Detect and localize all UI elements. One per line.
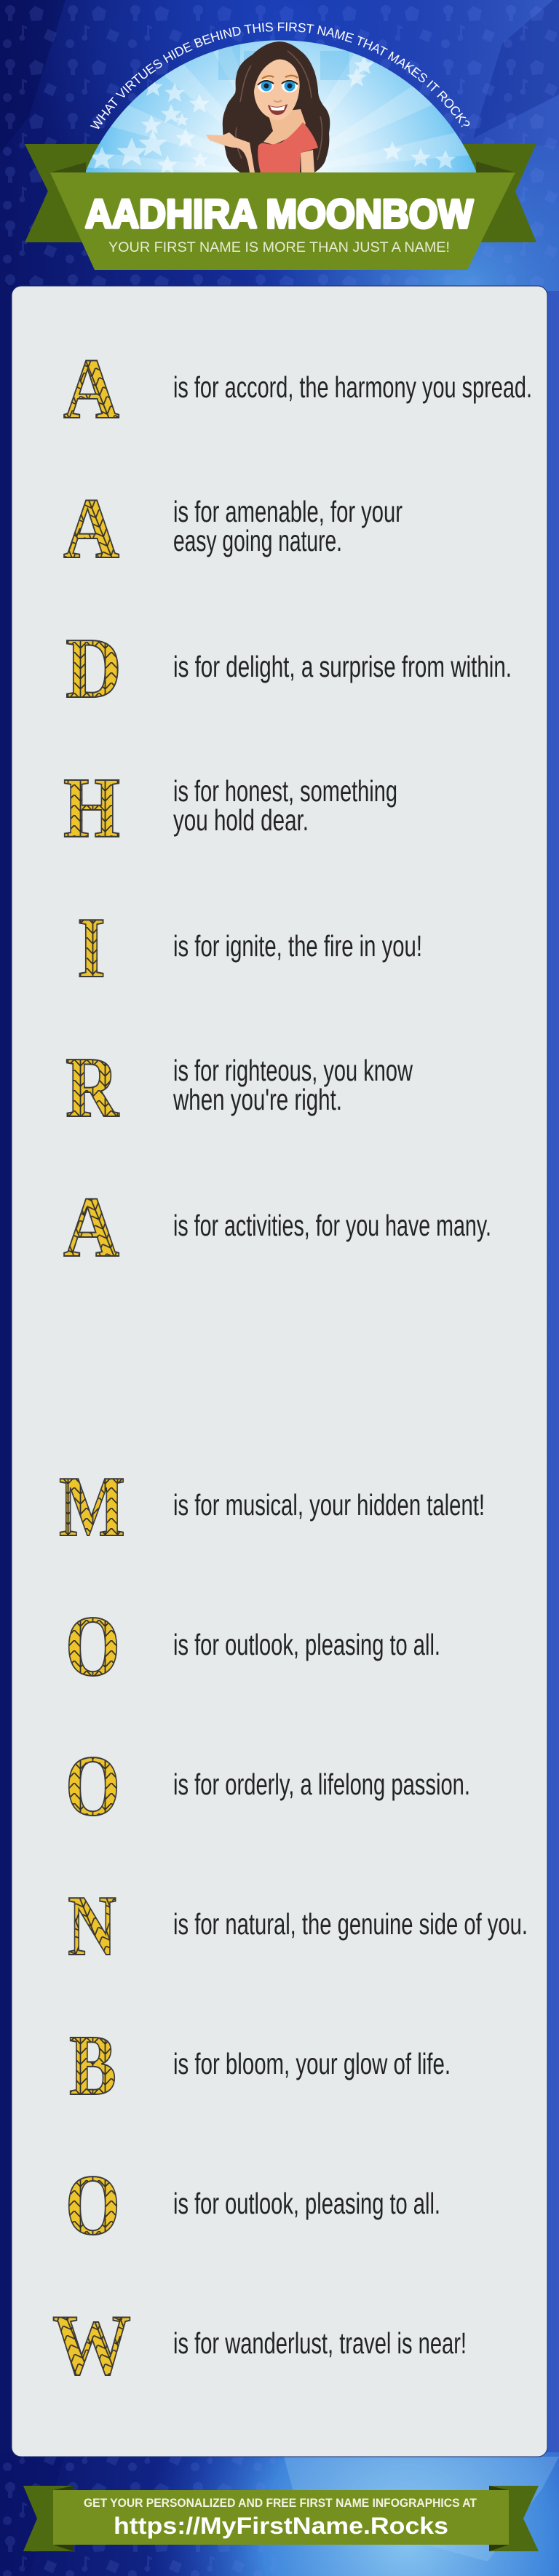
neck and chest <box>263 109 306 145</box>
ribbon front <box>53 2490 509 2545</box>
text: is for righteous, you know <box>173 1054 413 1087</box>
ribbon left tail <box>25 144 102 242</box>
ribbon tails <box>23 2486 539 2551</box>
row M musical <box>59 1458 485 1554</box>
ribbon right tail <box>460 143 536 242</box>
text: easy going nature. <box>173 524 342 557</box>
text: when you're right. <box>173 1083 342 1116</box>
letter D: D <box>66 620 122 716</box>
far arm <box>301 150 314 172</box>
row W wanderlust <box>52 2297 467 2393</box>
mouth <box>268 104 288 115</box>
row A accord <box>63 341 532 437</box>
letter I: I <box>77 899 106 995</box>
letter A: A <box>63 480 119 576</box>
sunburst dome <box>86 40 476 172</box>
row D delight <box>66 620 512 716</box>
letter N: N <box>68 1877 116 1973</box>
call to action: GET YOUR PERSONALIZED AND FREE FIRST NAME INFOGRAPHICS AT <box>84 2497 477 2510</box>
text <box>173 1054 413 1116</box>
arm and hand <box>206 132 255 172</box>
url: https://MyFirstName.Rocks <box>114 2513 448 2539</box>
letter A: A <box>63 1179 119 1275</box>
row O orderly <box>66 1738 470 1834</box>
letter A: A <box>63 341 119 437</box>
row N natural <box>68 1877 528 1973</box>
text: is for ignite, the fire in you! <box>173 929 422 963</box>
ribbon front <box>50 172 515 270</box>
letter B: B <box>69 2017 116 2113</box>
eyebrows <box>262 76 298 79</box>
text <box>173 774 397 837</box>
text: is for outlook, pleasing to all. <box>173 1628 440 1661</box>
ribbon folds <box>50 162 515 172</box>
row O outlook <box>66 1598 440 1694</box>
text: is for outlook, pleasing to all. <box>173 2187 440 2220</box>
title: AADHIRA MOONBOW <box>85 191 473 236</box>
row B bloom <box>69 2017 451 2113</box>
row I ignite <box>77 899 422 995</box>
shirt <box>258 122 318 172</box>
letter O: O <box>66 2157 120 2253</box>
ribbon folds <box>53 2486 509 2551</box>
letter O: O <box>66 1598 120 1694</box>
row O outlook <box>66 2157 440 2253</box>
row A amenable <box>63 480 403 576</box>
text <box>173 495 403 557</box>
letter R: R <box>66 1039 119 1135</box>
footer ribbon <box>23 2486 539 2551</box>
header <box>25 22 536 270</box>
text: is for bloom, your glow of life. <box>173 2047 451 2080</box>
nose <box>274 100 282 102</box>
text: is for honest, something <box>173 774 397 808</box>
hair <box>223 41 330 172</box>
letter O: O <box>66 1738 120 1834</box>
text: is for amenable, for your <box>173 495 403 528</box>
letter W: W <box>52 2297 131 2393</box>
row R righteous <box>66 1039 413 1135</box>
eyes <box>258 79 298 92</box>
row H honest <box>63 760 397 856</box>
letter M: M <box>59 1458 125 1554</box>
row A activities <box>63 1179 491 1275</box>
text: you hold dear. <box>173 803 309 837</box>
face <box>254 60 300 120</box>
subtitle: YOUR FIRST NAME IS MORE THAN JUST A NAME! <box>108 239 450 255</box>
curved tagline: WHAT VIRTUES HIDE BEHIND THIS FIRST NAME THAT MAKES IT ROCK? <box>90 22 470 130</box>
character illustration <box>206 41 330 172</box>
letter H: H <box>63 760 120 856</box>
